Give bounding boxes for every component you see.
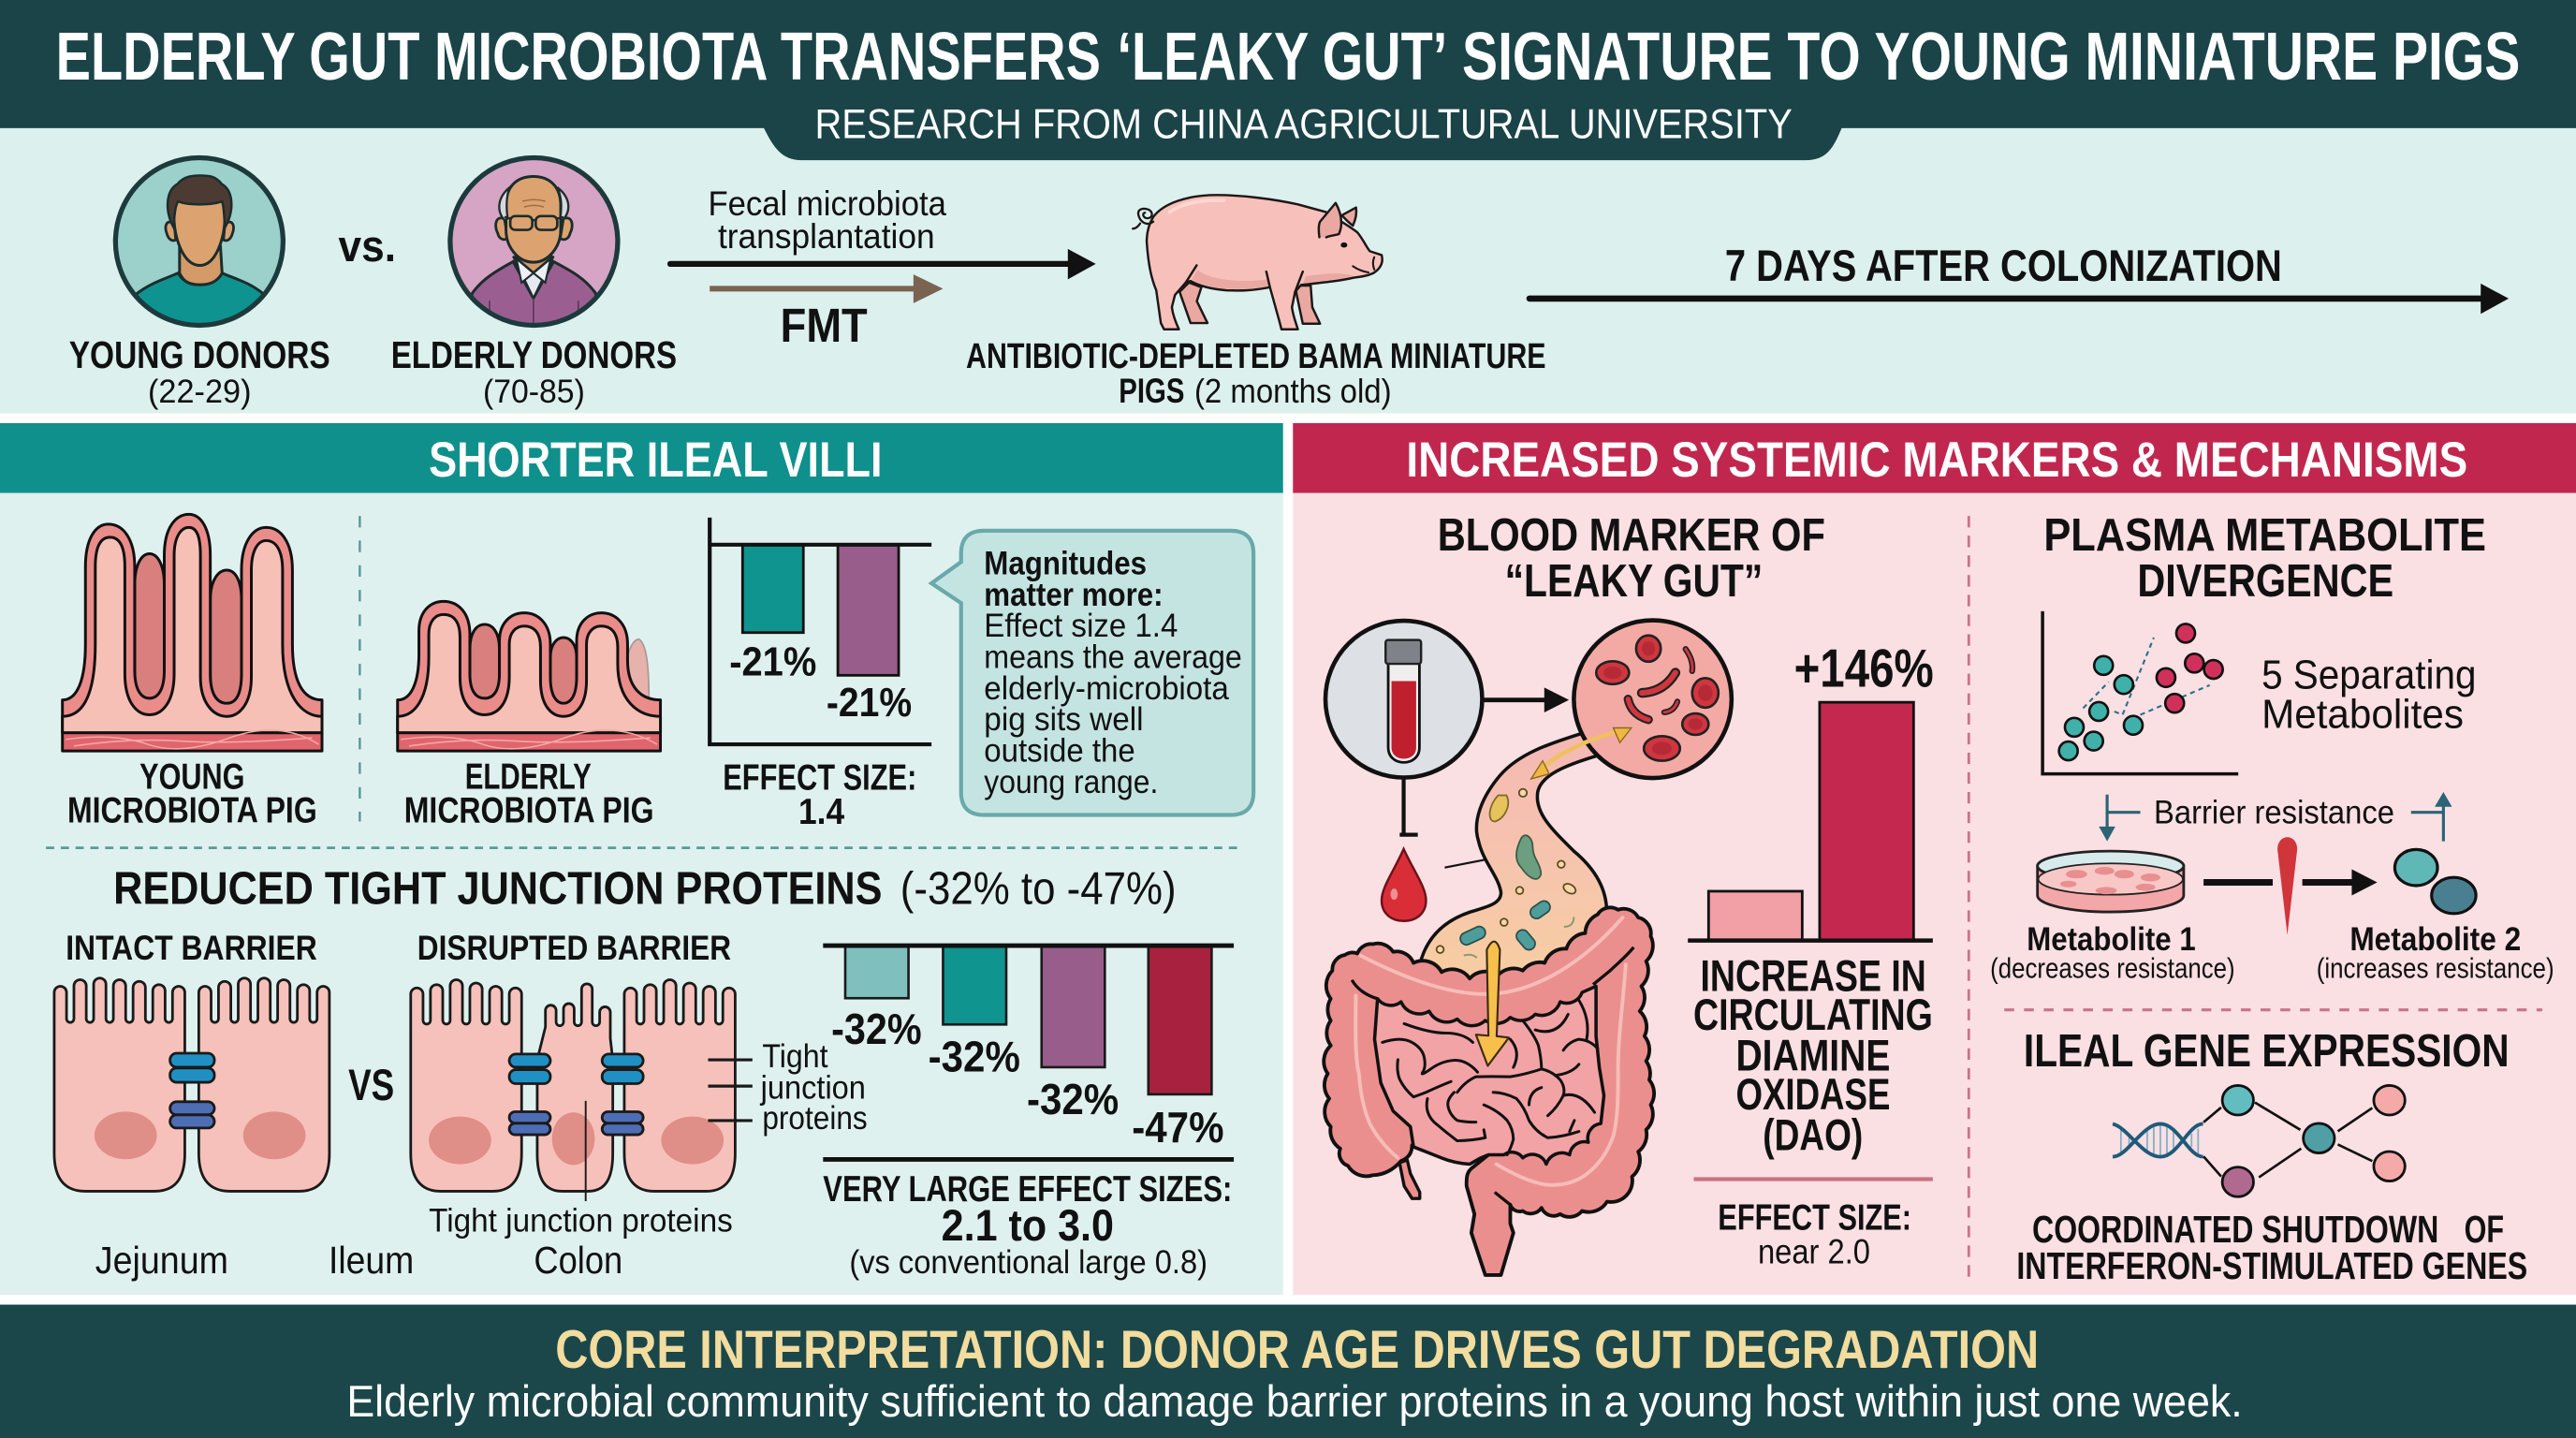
label: jejunum: Jejunum [95, 1239, 228, 1282]
callout: magnitudes matter more: young range. [984, 764, 1158, 800]
very large effect sizes: (vs conventional large 0.8) [849, 1244, 1208, 1281]
timeline label: 7 DAYS AFTER COLONIZATION [1725, 242, 2282, 291]
icon: blood drop [1382, 849, 1426, 921]
label: tight junction proteins side: proteins [762, 1100, 868, 1137]
title [56, 20, 2520, 95]
elderly donors label: (70-85) [483, 374, 585, 410]
FMT heading: FMT [781, 299, 868, 352]
text: 5 separating metabolites: 5 Separating [2261, 652, 2476, 697]
header banner [0, 0, 2576, 160]
illustration: colon and small intestine [1324, 907, 1654, 1275]
text: increase in circulating DAO: (DAO) [1763, 1111, 1863, 1161]
bar chart: DAO increase [1688, 639, 1934, 941]
panel: right, systemic markers [1293, 423, 2576, 1295]
heading: blood marker: “LEAKY GUT” [1505, 556, 1763, 607]
icon: young donor avatar [115, 157, 283, 337]
callout: magnitudes matter more: Magnitudes [984, 545, 1147, 581]
text: 5 separating metabolites: Metabolites [2261, 692, 2464, 738]
bar chart: tight junction proteins: -32% [1027, 1075, 1119, 1123]
heading: reduced tight junction proteins: (-32% to -47%) [900, 863, 1177, 914]
panel: left, villi and tight junctions [0, 423, 1283, 1295]
icon: blood cells circle [1573, 621, 1732, 778]
illustration: disrupted barrier cells [411, 979, 753, 1201]
heading: plasma metabolite divergence: DIVERGENCE [2137, 556, 2393, 607]
title: ELDERLY GUT MICROBIOTA TRANSFERS [56, 20, 1101, 95]
callout: magnitudes matter more: Effect size 1.4 [984, 608, 1178, 644]
label: elderly microbiota pig: ELDERLY [465, 756, 592, 797]
callout: magnitudes matter more: pig sits well [984, 701, 1144, 738]
effect size near 2.0: near 2.0 [1758, 1233, 1870, 1271]
effect size 1.4 [723, 758, 916, 832]
arrow: yellow down into intestine [1476, 942, 1509, 1066]
footer sentence: Elderly microbial community sufficient to damage barrier proteins in a young host within just one week. [346, 1377, 2243, 1427]
illustration: elderly villi [398, 601, 661, 751]
icon: gut tube leaking into bloodstream [1419, 733, 1606, 1005]
bar chart: villus height: -21% [827, 680, 912, 726]
text: 5 separating metabolites [2261, 652, 2476, 738]
text: increase in circulating DAO [1693, 951, 1933, 1161]
young donors label: YOUNG DONORS [69, 333, 330, 376]
callout: magnitudes matter more: matter more: [984, 577, 1164, 613]
heading: plasma metabolite divergence [2043, 510, 2486, 607]
label: ileum: Ileum [329, 1239, 414, 1282]
text: increase in circulating DAO: CIRCULATING [1693, 990, 1933, 1040]
icon: elderly donor avatar [450, 157, 618, 337]
icon: metabolite circles [2394, 849, 2476, 914]
bar chart: tight junction proteins: -32% [831, 1005, 922, 1053]
very large effect sizes [823, 1169, 1232, 1281]
label: young microbiota pig [67, 756, 317, 830]
top study design band [0, 128, 2576, 413]
young donors label: (22-29) [148, 374, 252, 410]
label: tight junction proteins side: Tight [762, 1038, 828, 1075]
elderly donors label [391, 333, 677, 410]
heading: blood marker: BLOOD MARKER OF [1438, 510, 1825, 561]
label: tight junction proteins bottom: Tight junction proteins [429, 1202, 733, 1239]
label: metabolite 1: Metabolite 1 [2027, 921, 2196, 958]
text: coordinated shutdown: COORDINATED SHUTDOWN [2032, 1208, 2438, 1251]
label: disrupted barrier: DISRUPTED BARRIER [417, 929, 731, 967]
subtitle: RESEARCH FROM CHINA AGRICULTURAL UNIVERSITY [815, 100, 1793, 147]
footer: core interpretation [0, 1305, 2576, 1438]
arrow: tube to cells [1483, 687, 1569, 712]
arrow: timeline [1530, 284, 2509, 314]
heading: plasma metabolite divergence: PLASMA METABOLITE [2043, 510, 2486, 561]
text: coordinated shutdown [2016, 1208, 2527, 1287]
label: metabolite 2: Metabolite 2 [2349, 921, 2521, 958]
label: tight junction proteins side: junction [760, 1069, 866, 1106]
label: elderly microbiota pig: MICROBIOTA PIG [404, 790, 654, 830]
callout: magnitudes matter more: means the average [984, 638, 1242, 675]
label: metabolite 2 [2317, 921, 2554, 984]
label: colon: Colon [534, 1239, 622, 1282]
label: tight junction proteins side [760, 1038, 868, 1137]
arrow: FMT brown [710, 274, 943, 303]
callout: magnitudes matter more [931, 531, 1253, 815]
very large effect sizes: 2.1 to 3.0 [942, 1201, 1114, 1251]
icon: blood tube circle [1325, 621, 1482, 835]
icon: pig [1133, 195, 1383, 330]
callout: magnitudes matter more: outside the [984, 732, 1135, 769]
text: increase in circulating DAO: DIAMINE [1735, 1031, 1890, 1080]
footer heading: CORE INTERPRETATION: DONOR AGE DRIVES GUT DEGRADATION [555, 1320, 2039, 1380]
label: young microbiota pig: MICROBIOTA PIG [67, 790, 317, 830]
illustration: intact barrier cells [54, 978, 329, 1191]
pig label: (2 months old) [1194, 372, 1392, 410]
arrow: metabolite 1 to metabolite 2 with red spike [2203, 837, 2378, 935]
pig label [966, 336, 1546, 410]
effect size 1.4: EFFECT SIZE: [723, 758, 916, 799]
text: coordinated shutdown: OF [2465, 1208, 2504, 1251]
label: metabolite 1: (decreases resistance) [1990, 951, 2235, 984]
label: elderly microbiota pig [404, 756, 654, 830]
FMT text label: transplantation [718, 217, 935, 256]
text: increase in circulating DAO: OXIDASE [1735, 1070, 1890, 1120]
bar chart: villus height [710, 518, 931, 744]
heading: shorter ileal villi: SHORTER ILEAL VILLI [429, 433, 882, 488]
bar chart: DAO increase: +146% [1794, 639, 1934, 699]
bar chart: tight junction proteins [823, 946, 1234, 1152]
barrier resistance arrows: Barrier resistance [2154, 794, 2394, 830]
pig label: PIGS [1119, 372, 1184, 410]
effect size near 2.0: EFFECT SIZE: [1718, 1198, 1911, 1239]
FMT text label [708, 184, 946, 256]
illustration: young villi [63, 514, 322, 751]
arrow: yellow leak [1531, 728, 1632, 779]
VS label: VS [348, 1061, 394, 1110]
effect size near 2.0 [1718, 1198, 1911, 1271]
network: DNA and gene nodes [2113, 1085, 2405, 1196]
heading: reduced tight junction proteins: REDUCED TIGHT JUNCTION PROTEINS [113, 863, 882, 914]
bar chart: villus height: -21% [729, 638, 816, 684]
label: young microbiota pig: YOUNG [139, 756, 245, 797]
title: ‘LEAKY GUT’ [1117, 20, 1447, 95]
young donors label [69, 333, 330, 410]
barrier resistance arrows [2099, 792, 2452, 842]
callout: magnitudes matter more: elderly-microbiota [984, 670, 1229, 707]
FMT text label: Fecal microbiota [708, 184, 946, 223]
vs label: vs. [339, 222, 396, 271]
pig label: ANTIBIOTIC-DEPLETED BAMA MINIATURE [966, 336, 1546, 375]
arrow: transplantation [670, 249, 1096, 279]
effect size 1.4: 1.4 [798, 792, 845, 832]
text: increase in circulating DAO: INCREASE IN [1701, 951, 1926, 1001]
heading: blood marker [1438, 510, 1825, 607]
icon: petri dish [2038, 851, 2184, 912]
label: intact barrier: INTACT BARRIER [66, 929, 317, 967]
very large effect sizes: VERY LARGE EFFECT SIZES: [823, 1169, 1232, 1210]
bar chart: tight junction proteins: -47% [1132, 1103, 1224, 1152]
bar chart: tight junction proteins: -32% [929, 1032, 1020, 1080]
elderly donors label: ELDERLY DONORS [391, 333, 677, 376]
scatter plot: metabolites [2042, 611, 2238, 774]
label: metabolite 1 [1990, 921, 2235, 984]
